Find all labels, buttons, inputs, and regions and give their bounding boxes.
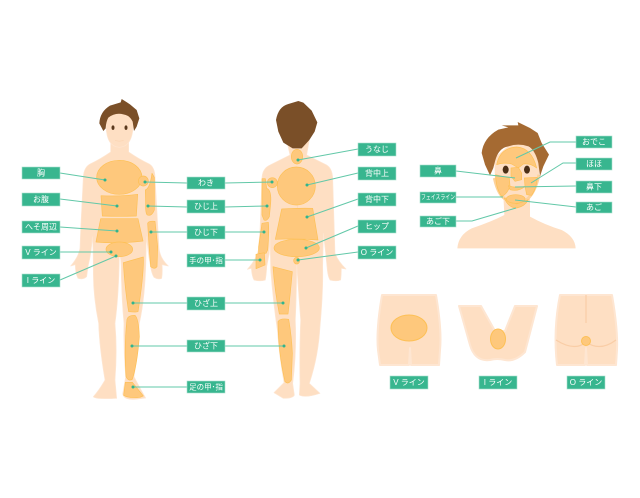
label: upper back <box>358 167 396 180</box>
label: above elbow: ひじ上 <box>194 202 218 211</box>
zone: foot <box>124 382 143 398</box>
label: face line: フェイスライン <box>421 193 455 201</box>
zone: hip <box>274 239 319 257</box>
label: nose <box>420 165 456 177</box>
face skin <box>494 143 540 201</box>
label: chin: あご <box>586 202 602 212</box>
label: top of foot and toes: 足の甲･指 <box>189 382 223 392</box>
zone: navel area <box>96 219 143 243</box>
label: forehead: おでこ <box>582 138 606 146</box>
label: forehead <box>576 136 612 148</box>
zone: armpit <box>267 178 277 188</box>
zone: chin <box>506 195 525 203</box>
label: armpit: わき <box>198 178 214 188</box>
label: bottom I line <box>479 376 517 389</box>
label: under nose: 鼻下 <box>586 182 602 192</box>
label: under chin: あご下 <box>426 216 450 226</box>
zone: upper arm <box>145 173 154 215</box>
label: O line: O ライン <box>361 248 393 257</box>
detail: I line <box>459 306 537 360</box>
label: back of hand and fingers <box>187 254 225 267</box>
zone: upper back <box>277 167 315 205</box>
label: lower back <box>358 193 396 206</box>
label: I line: I ライン <box>27 276 55 285</box>
label: bottom V line <box>390 376 428 389</box>
zone: lower back <box>275 208 318 240</box>
label: V line <box>22 246 60 259</box>
detail: V line <box>378 295 440 365</box>
face line zone <box>494 175 539 200</box>
label: around navel: へそ周辺 <box>25 222 57 232</box>
zone: armpit <box>138 176 148 186</box>
detail zone: O line <box>582 336 590 346</box>
eyes <box>503 166 530 174</box>
zone: hand <box>256 253 265 269</box>
front head <box>106 110 133 147</box>
label: bottom V line: V ライン <box>393 378 425 387</box>
label: nape <box>358 143 396 156</box>
back body figure <box>247 101 346 398</box>
detail zone: I line <box>490 329 506 349</box>
front body figure <box>71 99 168 399</box>
label: lower back: 背中下 <box>365 194 389 204</box>
back body skin <box>247 140 346 398</box>
label: above knee: ひざ上 <box>194 298 218 308</box>
label: nape: うなじ <box>365 145 389 154</box>
label: hip <box>358 220 396 233</box>
label: I line <box>22 274 60 287</box>
label: below knee: ひざ下 <box>194 340 218 350</box>
label: above elbow <box>187 200 225 213</box>
back hair <box>276 101 317 148</box>
label: face line <box>420 192 456 203</box>
zone: abdomen <box>101 194 138 216</box>
label: cheek <box>576 158 612 170</box>
zone: upper arm <box>262 179 271 220</box>
label: around navel <box>22 221 60 233</box>
zone: nose <box>511 167 522 181</box>
label: above knee <box>187 297 225 310</box>
label: armpit <box>187 177 225 189</box>
neck and shoulders <box>457 195 576 248</box>
label: abdomen <box>22 193 60 206</box>
label: hip: ヒップ <box>365 222 389 231</box>
zone: forearm <box>259 222 269 253</box>
detail: O line <box>556 295 617 365</box>
zone: V line <box>106 242 133 257</box>
label: top of foot and toes <box>187 381 225 393</box>
front body skin <box>71 140 168 399</box>
label: below elbow: ひじ下 <box>194 228 218 237</box>
label: under chin <box>420 216 456 227</box>
label: upper back: 背中上 <box>365 168 389 178</box>
label: abdomen: お腹 <box>33 194 49 204</box>
front eyes and mouth <box>111 125 127 141</box>
leader lines <box>60 142 576 388</box>
label: bottom I line: I ライン <box>484 378 512 387</box>
zone: above knee <box>273 267 292 314</box>
label: below knee <box>187 340 225 352</box>
zone: forearm <box>148 221 158 268</box>
label: chin <box>576 202 612 213</box>
label: nose: 鼻 <box>434 166 442 176</box>
label: chest <box>22 167 60 179</box>
detail crease: O line <box>556 295 616 347</box>
face close-up <box>457 122 576 248</box>
zone: forehead <box>497 147 537 168</box>
zone: under chin <box>504 198 528 208</box>
hair <box>482 122 549 176</box>
zone: cheek right <box>524 177 537 195</box>
zone: cheek left <box>496 175 510 196</box>
zone: chest <box>97 160 142 194</box>
label: cheek: ほほ <box>586 160 602 168</box>
label: V line: V ライン <box>25 248 57 257</box>
zone: nape <box>291 149 303 164</box>
zone: above knee <box>123 257 143 312</box>
zone: under nose <box>508 186 525 190</box>
label: under nose <box>576 181 612 193</box>
label: O line <box>358 246 396 259</box>
label: below elbow <box>187 226 225 239</box>
front hair <box>99 99 139 131</box>
zone: below knee <box>278 319 292 383</box>
detail zone: V line <box>391 315 427 341</box>
label: bottom O line: O ライン <box>570 378 602 387</box>
label: back of hand and fingers: 手の甲･指 <box>189 255 223 265</box>
zone: below knee <box>125 315 139 380</box>
zone: O line <box>294 257 300 264</box>
spine line <box>296 185 298 237</box>
label: chest: 胸 <box>37 168 45 178</box>
label: bottom O line <box>567 376 605 389</box>
